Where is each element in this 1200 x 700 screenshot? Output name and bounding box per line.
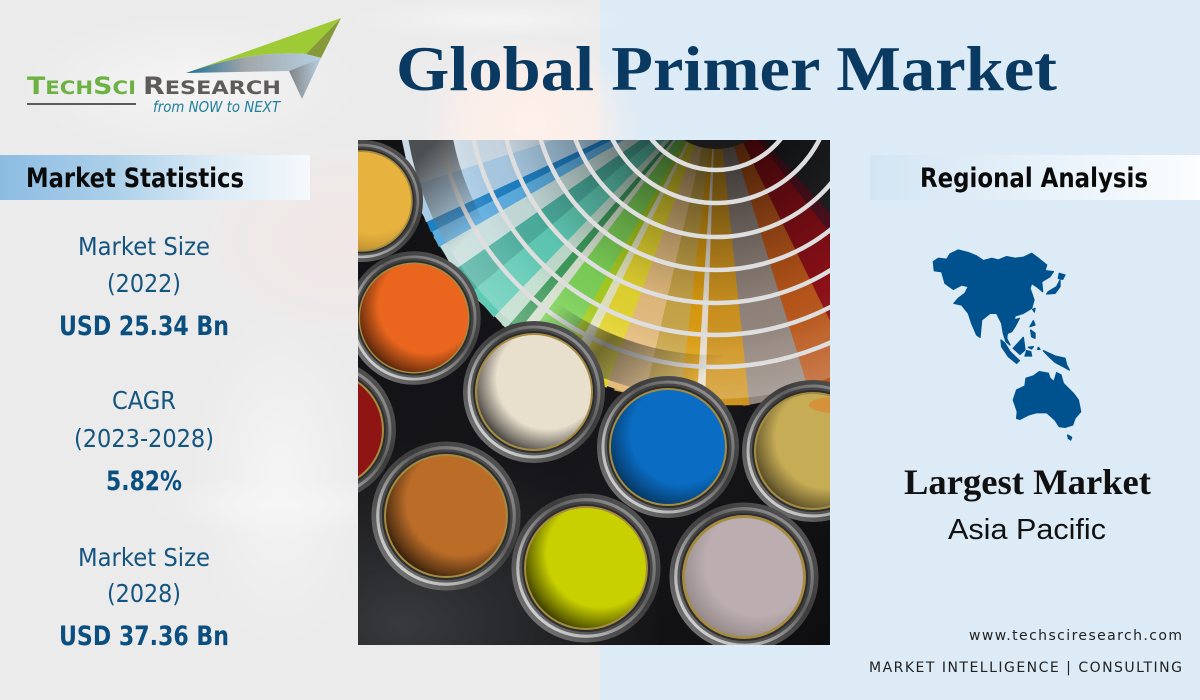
paint can: lime: [511, 493, 661, 643]
stat: CAGR: CAGR: [112, 386, 176, 415]
paint can: mauve: [669, 502, 819, 652]
stat: CAGR: 5.82%: [106, 466, 182, 497]
stat: market size 2022: (2022): [107, 269, 181, 298]
colour fan: [391, 0, 1036, 413]
logo: TechSci Research: RESEARCH: [143, 72, 281, 100]
paint can: brown: [371, 441, 521, 591]
logo: TechSci Research: from NOW to NEXT: [153, 98, 282, 116]
logo: TechSci Research: [27, 18, 341, 116]
paint can: orange: [347, 251, 481, 385]
paint can: blue: [597, 376, 739, 518]
stat: market size 2022: Market Size: [78, 232, 210, 261]
title: Global Primer Market: [396, 33, 1058, 104]
panel: market statistics values: [59, 232, 229, 652]
panel: market statistics heading: [0, 155, 310, 200]
stat: market size 2022: [59, 232, 229, 342]
panel: regional analysis heading: [870, 155, 1200, 200]
stat: CAGR: (2023-2028): [74, 424, 214, 453]
paint can: yellow: [301, 140, 423, 262]
paint can: olive yellow: [742, 380, 884, 522]
stat: CAGR: [74, 386, 214, 497]
stat: market size 2028: [59, 543, 229, 652]
text: largest market: Largest Market: [904, 462, 1151, 502]
panel: market statistics heading: Market Statistics: [26, 163, 244, 194]
paint can: cream: [463, 321, 605, 463]
logo: TechSci Research: TECHSCI: [27, 72, 136, 100]
photo: paint cans and colour fan: [358, 140, 830, 645]
stat: market size 2022: USD 25.34 Bn: [59, 311, 229, 342]
stat: market size 2028: (2028): [107, 579, 181, 608]
paint can: red: [254, 359, 396, 501]
icon: Asia Pacific map: [933, 250, 1081, 440]
panel: regional analysis heading: Regional Analysis: [920, 163, 1148, 194]
background: left blurred panel: [0, 0, 640, 700]
text: Asia Pacific: Asia Pacific: [948, 514, 1106, 546]
stat: market size 2028: Market Size: [78, 543, 210, 572]
text: tagline: MARKET INTELLIGENCE | CONSULTING: [869, 660, 1182, 676]
stat: market size 2028: USD 37.36 Bn: [59, 621, 229, 652]
text: website: www.techsciresearch.com: [969, 628, 1182, 644]
